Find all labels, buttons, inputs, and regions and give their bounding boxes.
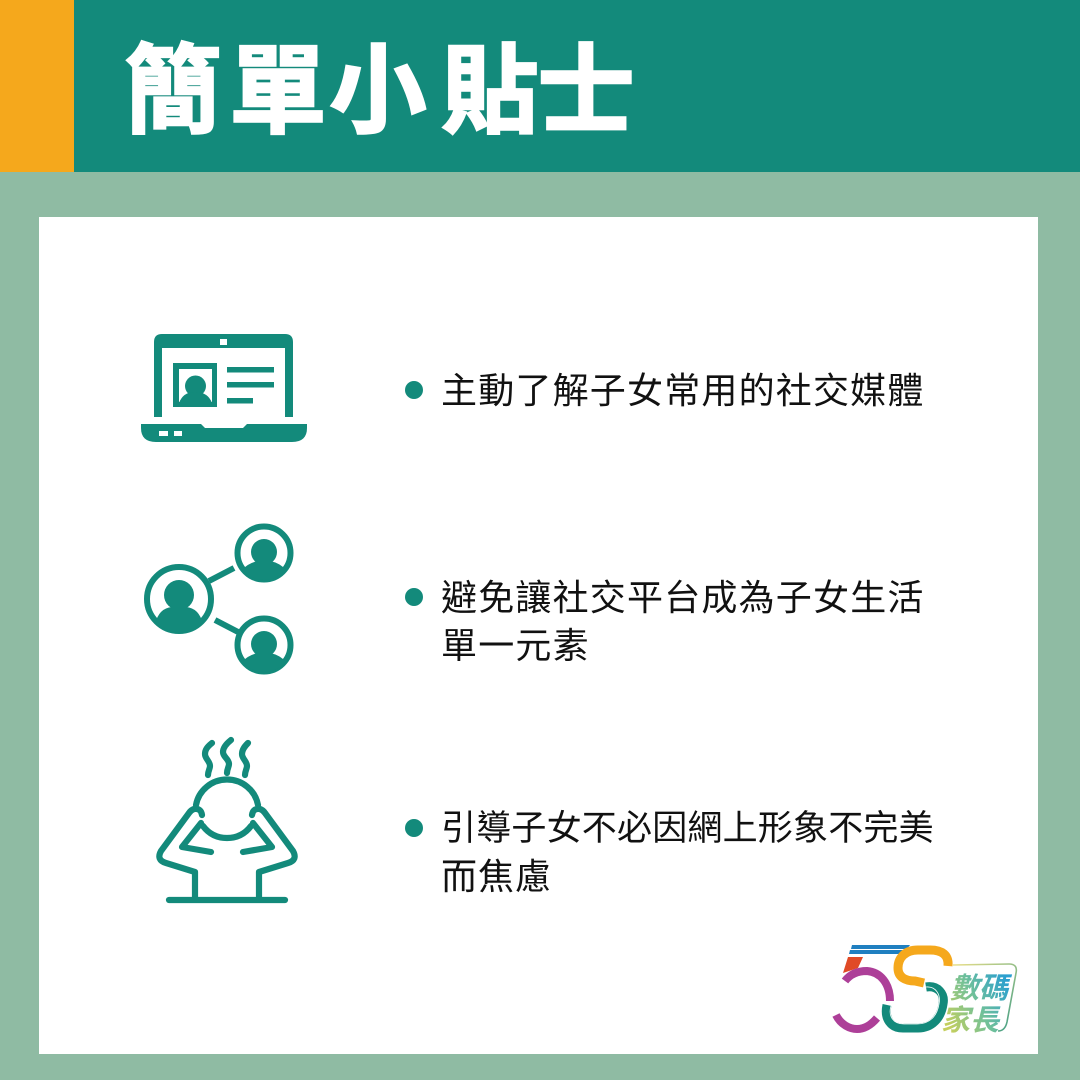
tip 1 bullet xyxy=(405,381,423,399)
panel: tips xyxy=(39,217,1038,1054)
title: 小 xyxy=(330,37,426,146)
orange accent block xyxy=(0,0,74,172)
title xyxy=(124,37,634,146)
title: 單 xyxy=(230,37,326,146)
tip 1 text: 主動了解子女常用的社交媒體 xyxy=(441,370,925,411)
tip 3 text: 而焦慮 xyxy=(441,856,552,897)
title: 貼 xyxy=(442,37,538,146)
tip 2 bullet xyxy=(405,588,423,606)
tip 2 text: 避免讓社交平台成為子女生活 xyxy=(441,577,925,618)
tip 3 bullet xyxy=(405,819,423,837)
title: 士 xyxy=(538,37,634,146)
tip 2 text: 單一元素 xyxy=(441,625,590,666)
tip 2 text xyxy=(441,577,925,666)
title: 簡 xyxy=(124,37,222,146)
logo: 55 digital parents: 家長 xyxy=(941,1005,1001,1037)
logo: 55 digital parents: 數碼 xyxy=(950,973,1013,1005)
tip 3 text xyxy=(441,809,934,897)
tip 3 text: 引導子女不必因網上形象不完美 xyxy=(441,809,934,848)
header band xyxy=(0,0,1080,172)
icon: connected people xyxy=(144,524,294,674)
